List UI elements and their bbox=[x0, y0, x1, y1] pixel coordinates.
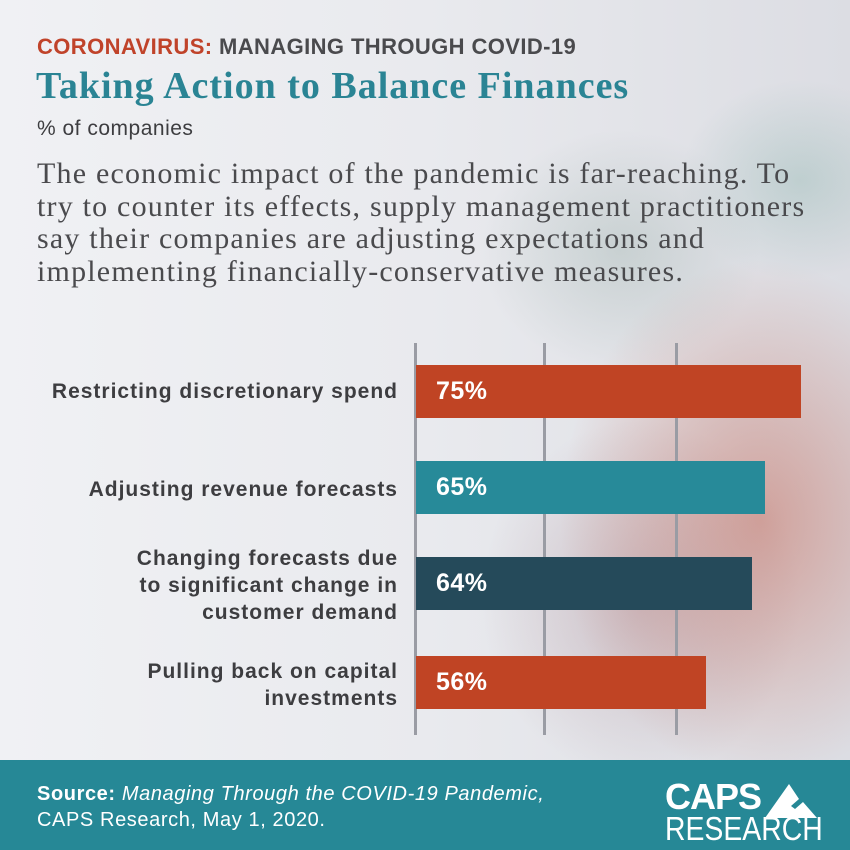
footer bbox=[0, 760, 850, 850]
bar chart bbox=[414, 343, 678, 735]
intro text: implementing financially-conservative measures. bbox=[37, 254, 684, 288]
title: Taking Action to Balance Finances bbox=[36, 65, 629, 107]
label: capital: investments bbox=[264, 687, 398, 710]
bar: 64%: 64% bbox=[436, 569, 488, 597]
logo: RESEARCH bbox=[665, 810, 823, 847]
label: demand: customer demand bbox=[202, 601, 398, 624]
kicker heading: CORONAVIRUS: MANAGING THROUGH COVID-19 bbox=[37, 34, 576, 59]
bar: 65%: 65% bbox=[436, 473, 488, 501]
logo bbox=[665, 776, 823, 847]
source: Source: Managing Through the COVID-19 Pandemic, bbox=[37, 783, 544, 805]
label: revenue: Adjusting revenue forecasts bbox=[89, 478, 398, 501]
label: capital: Pulling back on capital bbox=[147, 660, 398, 683]
bar: 56% bbox=[416, 656, 706, 709]
intro text: say their companies are adjusting expectations and bbox=[37, 222, 705, 255]
bar: 75%: 75% bbox=[436, 377, 488, 405]
intro text: The economic impact of the pandemic is far-reaching. To bbox=[37, 157, 790, 190]
bar: 75% bbox=[416, 365, 801, 418]
source: CAPS Research, May 1, 2020. bbox=[37, 809, 326, 831]
label: restricting: Restricting discretionary spend bbox=[52, 380, 398, 403]
bar: 56%: 56% bbox=[436, 668, 488, 696]
logo: CAPS bbox=[665, 776, 761, 817]
intro text bbox=[37, 157, 805, 288]
label: demand bbox=[137, 547, 398, 624]
intro text: try to counter its effects, supply management practitioners bbox=[37, 190, 805, 222]
label: capital bbox=[147, 660, 398, 710]
source bbox=[37, 783, 544, 831]
bar: 64% bbox=[416, 557, 752, 610]
label: demand: to significant change in bbox=[139, 574, 398, 597]
bar: 65% bbox=[416, 461, 765, 514]
subtitle: % of companies bbox=[37, 117, 193, 140]
label: demand: Changing forecasts due bbox=[137, 547, 398, 570]
